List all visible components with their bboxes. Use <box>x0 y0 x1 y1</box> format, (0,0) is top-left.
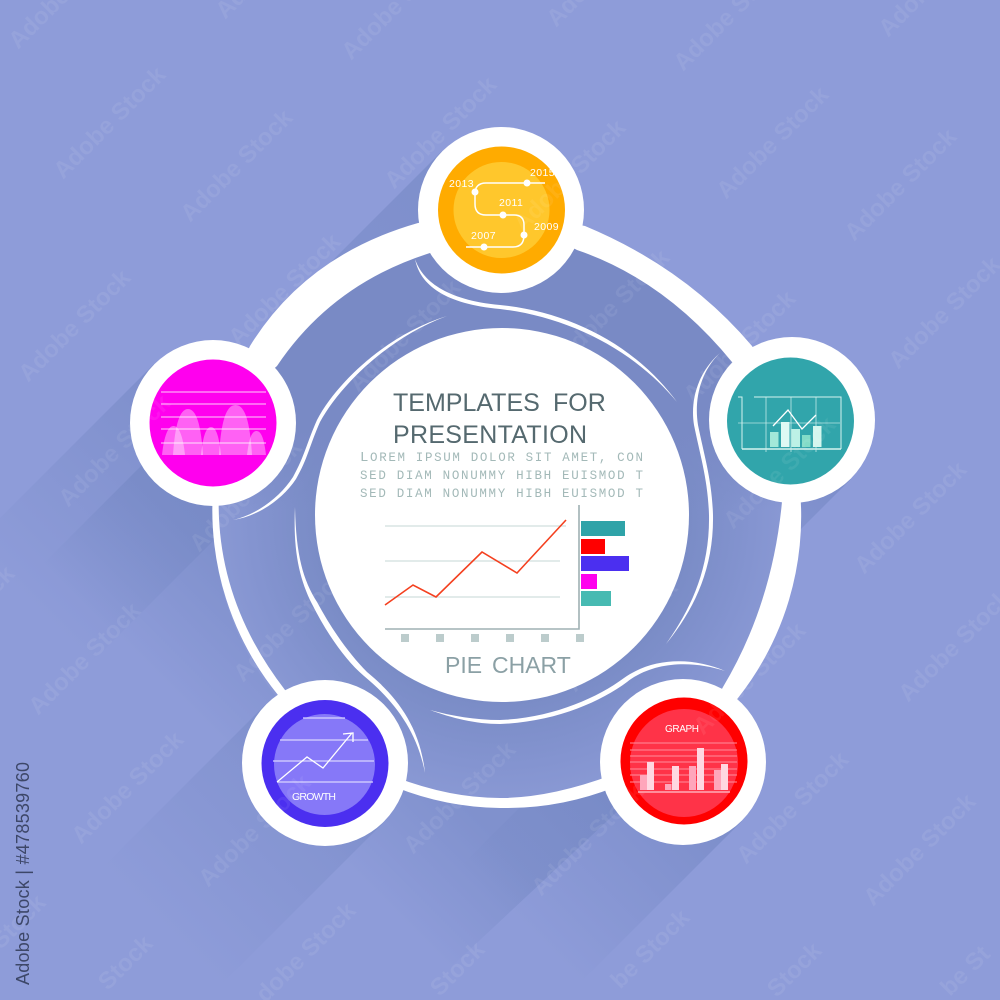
node: growth chart (bottom left): GROWTH <box>292 791 336 803</box>
pie chart label: CHART <box>492 652 571 678</box>
pie chart label: PIE <box>445 652 482 678</box>
node: timeline (top): 2007 <box>471 230 496 242</box>
node: graph chart (bottom right): GRAPH <box>665 724 699 735</box>
outer ring segments <box>212 210 801 808</box>
node: timeline (top): 2015 <box>530 167 555 179</box>
lorem ipsum text <box>360 450 643 501</box>
node: timeline (top): 2013 <box>449 178 474 190</box>
node: timeline (top): 2009 <box>534 221 559 233</box>
horizontal bar chart <box>581 521 629 606</box>
watermark pattern: Adobe Stock <box>398 736 522 859</box>
watermark pattern: Adobe Stock <box>711 81 835 204</box>
watermark pattern: Adobe Stock <box>193 769 317 892</box>
watermark pattern: Adobe Stock <box>175 104 299 227</box>
watermark pattern: Adobe Stock <box>849 456 973 579</box>
watermark pattern: Adobe Stock <box>839 123 963 246</box>
node: graph chart (bottom right) <box>600 679 766 845</box>
lorem ipsum text: SED DIAM NONUMMY HIBH EUISMOD T <box>360 487 643 501</box>
watermark pattern: Adobe Stock <box>53 389 177 512</box>
watermark pattern: Adobe Stock <box>718 411 842 534</box>
watermark pattern: Stock <box>93 930 159 995</box>
watermark pattern: Adobe Stock <box>23 597 147 720</box>
watermark pattern: Adobe Stock <box>678 285 802 408</box>
watermark pattern: Adobe Stock <box>48 61 172 184</box>
watermark pattern: be Stock <box>605 904 696 994</box>
watermark pattern: Adobe Stock <box>552 244 676 367</box>
watermark pattern: Adobe Stock <box>526 778 650 901</box>
stock id vertical text: Adobe Stock | #478539760 <box>13 762 33 985</box>
title: TEMPLATES <box>393 389 540 417</box>
watermark pattern: Adobe Stock <box>731 746 855 869</box>
watermark pattern: Adobe Stock <box>858 788 982 911</box>
watermark pattern: be St <box>935 941 996 1000</box>
watermark pattern: Adobe Stock <box>66 726 190 849</box>
center circle <box>315 328 689 702</box>
node: teal bar and line chart (right) <box>709 337 875 503</box>
lorem ipsum text: LOREM IPSUM DOLOR SIT AMET, CON <box>360 450 643 466</box>
watermark pattern: Adobe Stock <box>688 617 812 740</box>
lorem ipsum text: SED DIAM NONUMMY HIBH EUISMOD T <box>360 469 643 483</box>
watermark pattern: Adobe Stock <box>560 574 684 697</box>
line chart <box>385 505 584 642</box>
long shadows <box>0 151 851 998</box>
title: PRESENTATION <box>393 421 587 449</box>
watermark pattern: Adobe Stock <box>228 564 352 687</box>
watermark pattern: Adobe Stock <box>343 274 467 397</box>
watermark pattern: Adobe Stock <box>508 114 632 237</box>
node: timeline (top): 2011 <box>499 197 523 209</box>
title <box>393 389 606 449</box>
node: magenta area chart (left) <box>130 340 296 506</box>
node: timeline (top) <box>418 127 584 293</box>
watermark pattern: Adobe Stock <box>379 71 503 194</box>
watermark pattern: Adobe Stock <box>13 264 137 387</box>
ring interior <box>213 222 799 808</box>
node: growth chart (bottom left) <box>242 680 408 846</box>
watermark pattern: Adobe Stock <box>223 228 347 351</box>
title: FOR <box>553 389 606 417</box>
watermark pattern: Adobe Stock <box>184 434 308 557</box>
watermark pattern: Stock <box>425 936 491 1000</box>
thin swirl lines <box>233 259 725 773</box>
